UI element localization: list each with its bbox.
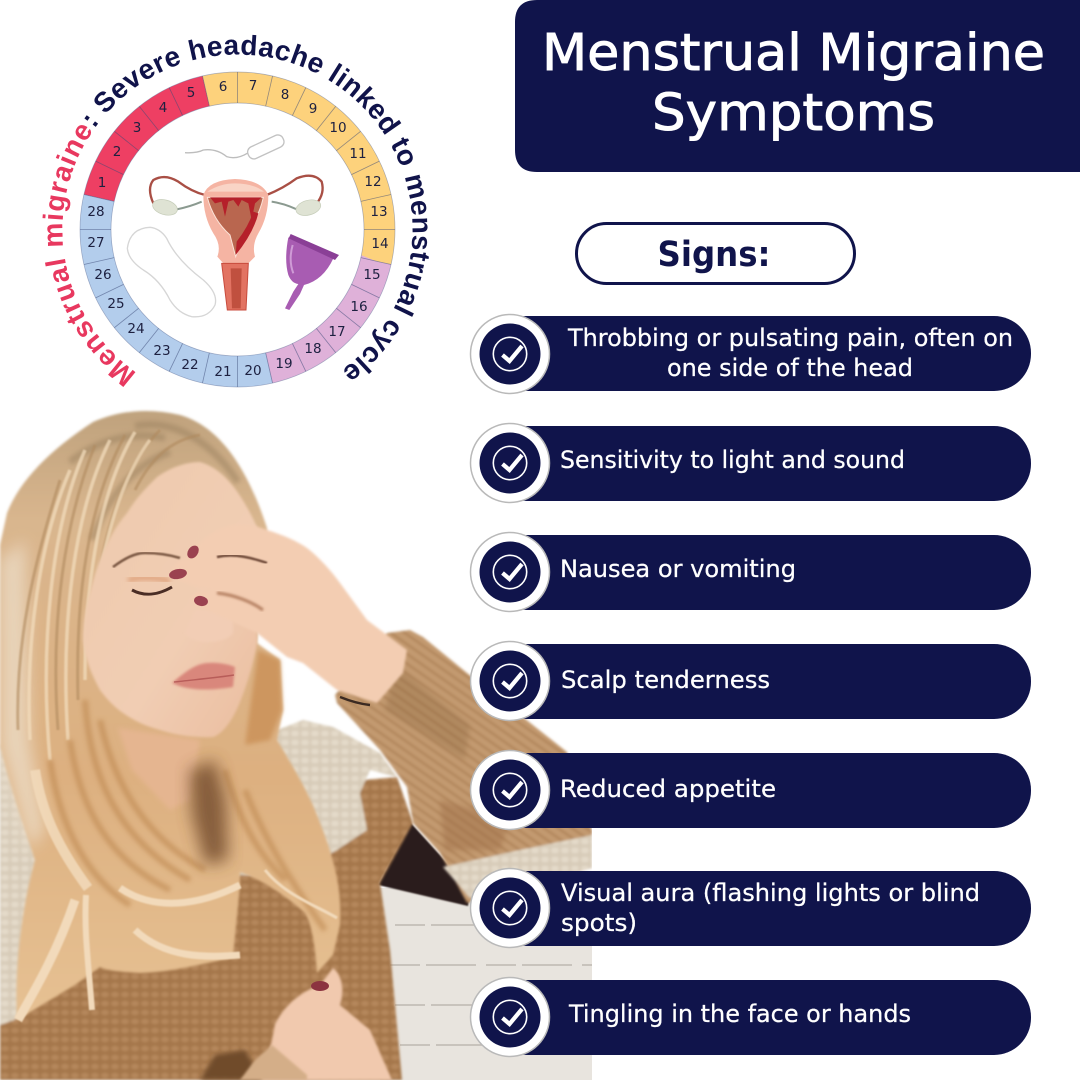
sign 6: spots) — [561, 909, 637, 937]
curved caption arc path — [62, 55, 412, 373]
sweater body — [0, 720, 413, 1080]
wheel: yellow phase days 6-14 — [67, 59, 408, 400]
wheel day numbers: 15 — [363, 267, 381, 283]
neck — [118, 728, 200, 810]
wheel day numbers: 22 — [181, 357, 199, 373]
wheel day numbers: 9 — [309, 101, 317, 117]
wheel day numbers: 28 — [87, 204, 105, 220]
wheel day numbers: 7 — [249, 78, 257, 94]
wheel day numbers: 3 — [133, 120, 141, 136]
golden lower strands — [50, 700, 325, 930]
wheel day numbers: 14 — [371, 236, 389, 252]
wheel day numbers: 1 — [98, 175, 106, 191]
wheel day numbers: 5 — [187, 85, 195, 101]
cuff shadow at wrist — [340, 697, 370, 705]
wheel day numbers: 10 — [329, 120, 347, 136]
dark gap under arm — [378, 822, 470, 906]
wheel day numbers: 4 — [159, 100, 167, 116]
blond tips — [18, 770, 337, 1020]
icon: tampon — [185, 133, 286, 161]
lower hand — [200, 968, 392, 1080]
wheel day numbers: 27 — [87, 235, 105, 251]
curved caption: Menstrual migraine: Severe headache linked to menstrual cycle — [42, 34, 429, 387]
dark crown strands — [70, 425, 238, 540]
wheel day numbers: 17 — [328, 324, 346, 340]
sign 7 — [470, 978, 1031, 1056]
sign 6 — [470, 868, 1031, 948]
wheel day numbers: 23 — [153, 343, 171, 359]
wheel day numbers: 25 — [107, 296, 125, 312]
wheel: pink phase days 15-19 — [67, 59, 408, 400]
wheel day numbers: 18 — [304, 341, 322, 357]
wheel day numbers: 8 — [281, 87, 289, 103]
sign 7: Tingling in the face or hands — [568, 1000, 911, 1028]
icon: sanitary pad — [127, 227, 216, 317]
wheel: blue phase days 20-28 — [67, 59, 408, 400]
hair — [0, 411, 340, 1020]
sign 3: Nausea or vomiting — [560, 555, 796, 583]
heading pill: Signs — [576, 224, 854, 284]
wheel day numbers: 12 — [364, 174, 382, 190]
hair shadow at neck — [190, 760, 228, 865]
title: Symptoms — [652, 84, 935, 143]
icon: menstrual cup — [285, 234, 339, 310]
wheel day numbers: 16 — [350, 299, 368, 315]
panel: cycle wheel with curved caption — [42, 34, 429, 388]
wheel: red phase days 1-5 — [67, 59, 408, 400]
sign 2: Sensitivity to light and sound — [560, 446, 905, 474]
hand on nose — [216, 526, 408, 704]
wheel day numbers: 11 — [349, 146, 367, 162]
darker hair strands — [18, 430, 200, 730]
sign 4: Scalp tenderness — [561, 666, 770, 694]
wheel day numbers: 13 — [370, 204, 388, 220]
sign 6: Visual aura (flashing lights or blind — [561, 879, 980, 907]
sign 1: Throbbing or pulsating pain, often on — [567, 324, 1013, 352]
sign 5 — [470, 750, 1031, 830]
sweater sleeve and cuff — [335, 630, 592, 903]
pale hair strands — [29, 432, 150, 760]
fingernails — [168, 543, 209, 607]
sign 1 — [470, 314, 1031, 394]
sign 1: one side of the head — [667, 354, 913, 382]
title: Menstrual Migraine — [542, 24, 1045, 83]
pale left hair zone — [0, 540, 45, 850]
sign 3 — [470, 532, 1031, 612]
wheel day numbers: 2 — [113, 144, 121, 160]
photo: woman with headache pinching nose — [0, 411, 592, 1080]
illustration: anatomy and period products — [127, 133, 339, 317]
sign 2 — [470, 424, 1031, 502]
wheel day numbers — [87, 78, 389, 380]
wheel day numbers: 21 — [214, 364, 232, 380]
sign 5: Reduced appetite — [560, 775, 776, 803]
title — [542, 24, 1045, 143]
facial features — [113, 553, 235, 690]
wheel day numbers: 6 — [219, 79, 227, 95]
icon: uterus — [150, 176, 323, 310]
wheel day numbers: 20 — [244, 363, 262, 379]
face — [83, 462, 257, 737]
sign 4 — [470, 642, 1031, 720]
sofa cushion — [380, 888, 592, 1080]
wheel day numbers: 24 — [127, 321, 145, 337]
header banner — [515, 0, 1080, 172]
wheel day numbers: 19 — [275, 356, 293, 372]
wheel day numbers: 26 — [94, 267, 112, 283]
heading pill: Signs: Signs: — [658, 235, 770, 275]
